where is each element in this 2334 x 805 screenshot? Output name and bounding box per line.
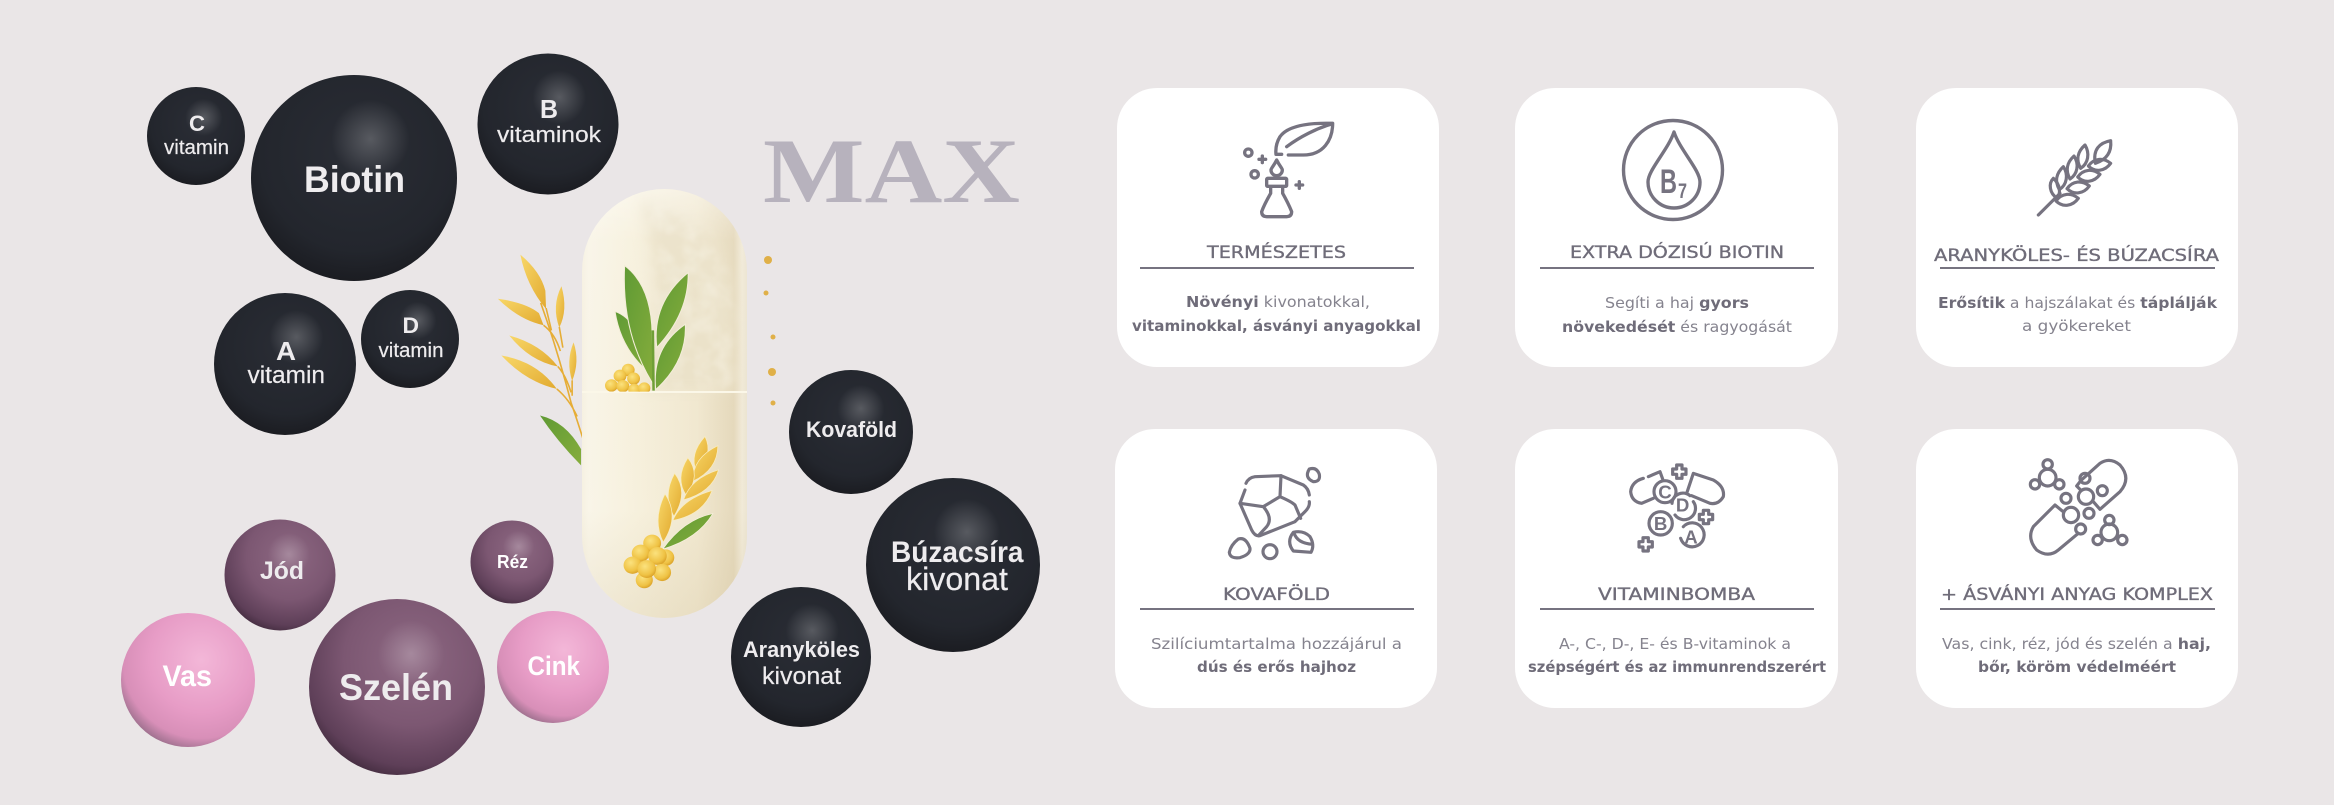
capsule shell [582, 189, 747, 618]
sphere: Cink [497, 611, 609, 723]
sphere: Vas [121, 613, 255, 747]
description [1151, 635, 1402, 676]
sphere: Kovaföld: Kovaföld [806, 417, 897, 442]
description: Növényi kivonatokkal, [1186, 293, 1370, 311]
icon: vitamins and capsule [1631, 465, 1724, 551]
description [1528, 635, 1827, 676]
sphere: A vitamin [214, 293, 356, 435]
sphere: A vitamin: vitamin [248, 362, 325, 389]
title: KOVAFÖLD [1223, 583, 1330, 605]
title: ARANYKÖLES- ÉS BÚZACSÍRA [1934, 244, 2219, 266]
sphere: A vitamin: A [276, 336, 296, 366]
divider [1140, 608, 1414, 610]
description: szépségért és az immunrendszerért [1528, 658, 1827, 676]
sphere: C vitamin [147, 87, 245, 185]
icon: B7 drop: 7 [1678, 180, 1687, 203]
divider [1540, 608, 1814, 610]
divider [1140, 267, 1414, 269]
icon: leaf and flask [1245, 123, 1333, 217]
description [1132, 293, 1421, 335]
sphere: Vas: Vas [162, 660, 212, 693]
title: TERMÉSZETES [1206, 241, 1346, 263]
description [1938, 294, 2218, 335]
card: Természetes [1117, 88, 1439, 367]
sphere: Jód: Jód [260, 557, 304, 585]
sphere: Szelén [309, 599, 485, 775]
icon: vitamins and capsule: C [1658, 481, 1672, 502]
icon: vitamins and capsule: D [1676, 495, 1689, 516]
card: Aranyköles- és búzacsíra [1916, 88, 2238, 367]
sphere: Aranyköles kivonat: kivonat [762, 663, 841, 690]
icon: stones [1229, 468, 1320, 559]
description: Segíti a haj gyors [1605, 294, 1749, 312]
description: növekedését és ragyogását [1562, 318, 1792, 336]
sphere: B vitaminok: B [540, 94, 558, 124]
sphere: Búzacsíra kivonat: kivonat [906, 561, 1008, 597]
divider [1540, 267, 1814, 269]
sphere: D vitamin [361, 290, 459, 388]
green leaves upper [615, 266, 688, 391]
icon: vitamins and capsule: A [1684, 526, 1698, 547]
divider [1940, 267, 2215, 269]
sphere: Biotin: Biotin [304, 159, 405, 200]
powder fill in upper half [582, 189, 747, 618]
sphere: Cink: Cink [528, 651, 581, 681]
millet cluster lower [624, 535, 674, 588]
title: EXTRA DÓZISÚ BIOTIN [1570, 241, 1784, 263]
divider [1940, 608, 2215, 610]
icon: broken capsule with molecules [2030, 460, 2127, 554]
sphere: B vitaminok [478, 54, 618, 194]
card: Ásványi anyag komplex [1916, 429, 2238, 708]
icon: B7 drop: B [1660, 163, 1677, 201]
title: VITAMINBOMBA [1598, 585, 1755, 605]
sphere: Búzacsíra kivonat [866, 478, 1040, 652]
description: A-, C-, D-, E- és B-vitaminok a [1559, 635, 1791, 653]
capsule [582, 189, 747, 618]
sphere: Biotin [251, 75, 457, 281]
sphere: Réz: Réz [497, 552, 528, 572]
sphere: Kovaföld [789, 370, 913, 494]
golden droplets [764, 256, 776, 406]
millet cluster upper [605, 364, 650, 395]
sphere: Búzacsíra kivonat: Búzacsíra [891, 536, 1024, 569]
description: vitaminokkal, ásványi anyagokkal [1132, 317, 1421, 335]
card: Extra dózisú biotin [1515, 88, 1838, 367]
wheat ear lower [658, 436, 719, 542]
golden wheat sprig behind capsule [498, 255, 584, 465]
description: Erősítik a hajszálakat és táplálják [1938, 294, 2218, 312]
description [1942, 635, 2211, 676]
title: + ÁSVÁNYI ANYAG KOMPLEX [1941, 583, 2213, 605]
icon: B7 drop [1624, 120, 1722, 220]
brand title: MAX: MAX [763, 120, 1020, 222]
sphere: Aranyköles kivonat [731, 587, 871, 727]
sphere: D vitamin: vitamin [378, 340, 444, 362]
sphere: Réz [470, 520, 554, 604]
icon: wheat ear [2038, 141, 2111, 215]
icon: vitamins and capsule: B [1654, 513, 1667, 534]
sphere: Aranyköles kivonat: Aranyköles [743, 637, 860, 662]
sphere: Jód [224, 520, 336, 630]
sphere: Szelén: Szelén [339, 667, 453, 708]
sphere: C vitamin: vitamin [164, 137, 229, 159]
description: bőr, köröm védelméért [1978, 658, 2177, 676]
sphere: B vitaminok: vitaminok [497, 122, 602, 147]
sphere: C vitamin: C [189, 111, 205, 136]
card: Vitaminbomba [1515, 429, 1838, 708]
botanical decoration inside capsule [605, 266, 719, 588]
description: Szilíciumtartalma hozzájárul a [1151, 635, 1402, 653]
description: Vas, cink, réz, jód és szelén a haj, [1942, 635, 2211, 653]
sphere: D vitamin: D [402, 313, 419, 338]
description: a gyökereket [2022, 317, 2131, 335]
description: dús és erős hajhoz [1197, 658, 1356, 676]
card: Kovaföld [1115, 429, 1437, 708]
description [1562, 294, 1792, 336]
